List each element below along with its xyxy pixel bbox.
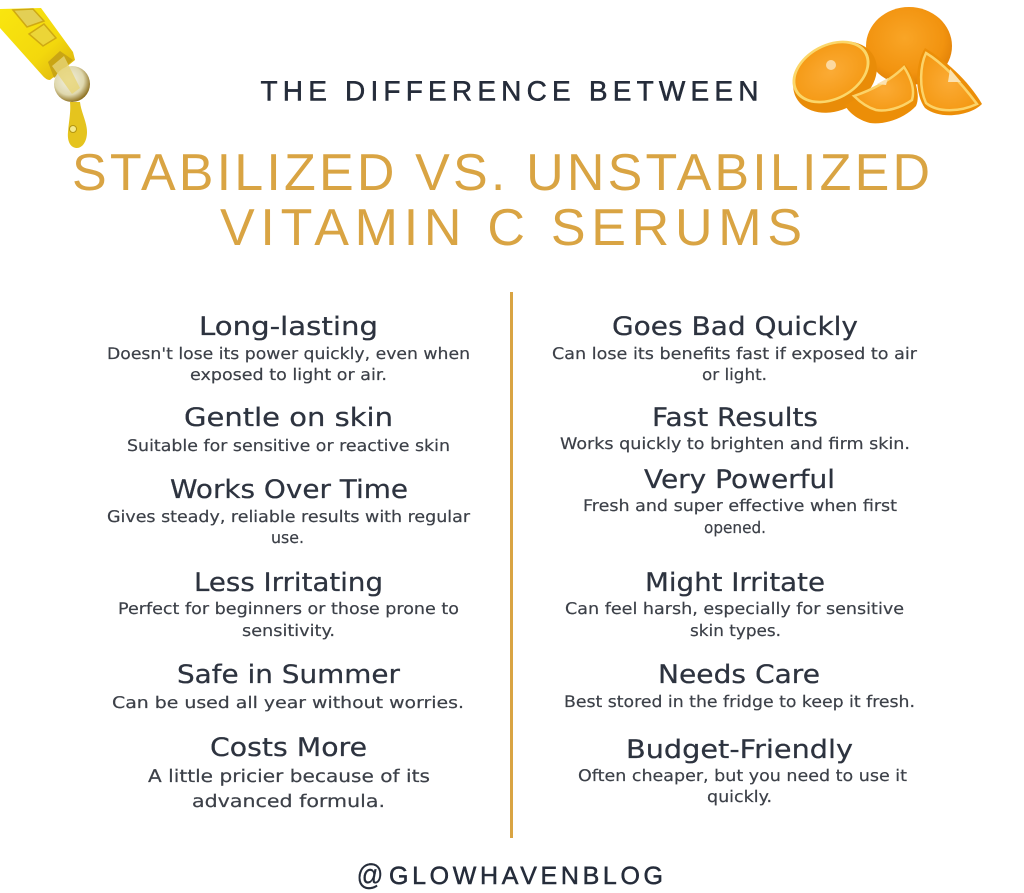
item: very powerful: Fresh and super effective when first <box>583 496 897 515</box>
item: safe in summer <box>112 660 464 712</box>
title <box>72 144 930 257</box>
item: safe in summer: Can be used all year without worries. <box>112 693 464 712</box>
item: goes bad quickly: or light. <box>702 365 767 384</box>
item: budget-friendly <box>578 735 907 806</box>
item: gentle on skin <box>127 403 450 455</box>
item: budget-friendly: quickly. <box>707 787 772 806</box>
item: might irritate: Might Irritate <box>645 568 825 598</box>
item: budget-friendly: Budget-Friendly <box>626 735 853 765</box>
middle wedge <box>845 64 918 123</box>
item: goes bad quickly: Can lose its benefits fast if exposed to air <box>552 344 917 363</box>
title: STABILIZED VS. UNSTABILIZED <box>72 144 930 202</box>
item: fast results <box>560 403 910 453</box>
item: goes bad quickly: Goes Bad Quickly <box>612 312 858 342</box>
item: works over time: Gives steady, reliable results with regular <box>107 507 470 526</box>
item: costs more: A little pricier because of its <box>148 767 430 787</box>
item: might irritate: Can feel harsh, especially for sensitive <box>565 599 904 618</box>
item: costs more: Costs More <box>210 733 367 763</box>
center divider <box>510 292 513 838</box>
item: needs care: Needs Care <box>658 660 820 690</box>
footer: handle: @ <box>356 859 384 892</box>
icon: oranges <box>781 7 982 127</box>
panel: stabilized column <box>107 312 470 812</box>
item: long-lasting <box>107 312 470 384</box>
item: might irritate: skin types. <box>690 621 781 640</box>
item: safe in summer: Safe in Summer <box>177 660 401 690</box>
item: needs care <box>564 660 915 711</box>
item: less irritating: sensitivity. <box>242 621 335 640</box>
right wedge <box>917 48 982 115</box>
item: long-lasting: Long-lasting <box>199 312 378 342</box>
item: gentle on skin: Gentle on skin <box>184 403 393 433</box>
whole orange <box>866 7 952 85</box>
item: budget-friendly: Often cheaper, but you need to use it <box>578 766 907 785</box>
item: needs care: Best stored in the fridge to keep it fresh. <box>564 692 915 711</box>
item: very powerful: opened. <box>704 518 766 537</box>
item: might irritate <box>565 568 904 640</box>
icon: serum dropper <box>0 8 90 148</box>
item: goes bad quickly <box>552 312 917 384</box>
item: costs more: advanced formula. <box>192 792 385 812</box>
item: costs more <box>148 733 430 812</box>
panel: unstabilized column <box>552 312 917 806</box>
item: less irritating: Less Irritating <box>194 568 383 598</box>
item: less irritating <box>118 568 459 640</box>
header: the difference between: THE DIFFERENCE BETWEEN <box>260 76 758 106</box>
item: very powerful: Very Powerful <box>644 465 835 495</box>
item: works over time: use. <box>271 528 304 547</box>
half orange <box>781 27 889 127</box>
item: long-lasting: exposed to light or air. <box>190 365 387 384</box>
item: long-lasting: Doesn't lose its power quickly, even when <box>107 344 470 363</box>
item: works over time: Works Over Time <box>170 475 408 505</box>
item: gentle on skin: Suitable for sensitive or reactive skin <box>127 436 450 455</box>
title: VITAMIN C SERUMS <box>220 199 802 257</box>
item: very powerful <box>583 465 897 537</box>
item: works over time <box>107 475 470 547</box>
item: less irritating: Perfect for beginners or those prone to <box>118 599 459 618</box>
item: fast results: Works quickly to brighten and firm skin. <box>560 434 910 453</box>
footer: handle: GLOWHAVENBLOG <box>389 862 663 890</box>
item: fast results: Fast Results <box>652 403 818 433</box>
